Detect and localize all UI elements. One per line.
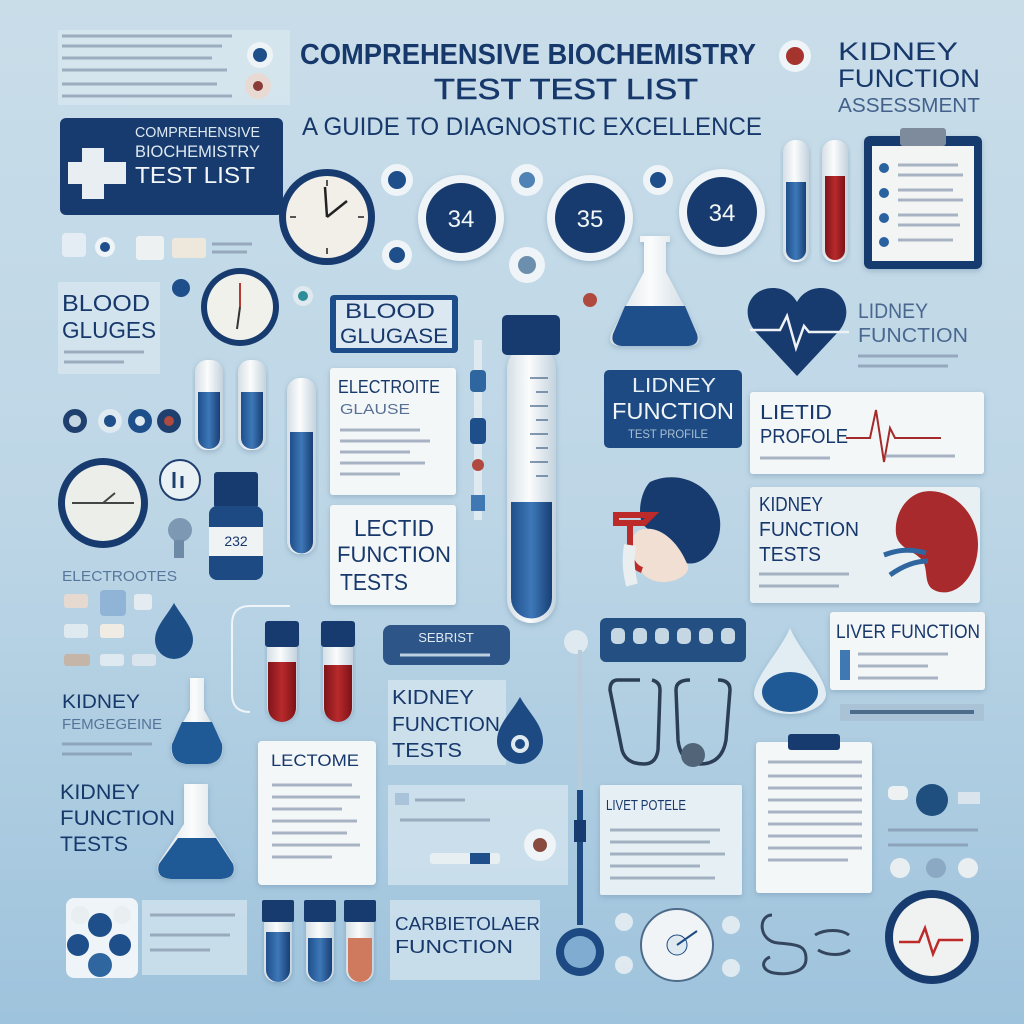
icon: ecg gauge: [885, 890, 979, 984]
icon: twin tubes: [195, 360, 266, 450]
icon: water drop left: [155, 603, 193, 659]
label: kidney function tests left: [60, 781, 175, 856]
panel: navy banner: [60, 118, 283, 215]
number badge 34: 34: [709, 200, 735, 227]
label: kidney function tests left: FUNCTION: [60, 807, 175, 830]
panel: kidney function tests centre: FUNCTION: [392, 714, 500, 736]
row of small chips: [62, 233, 252, 260]
icon: tall tube: [287, 378, 316, 554]
small icon grid right: [888, 784, 980, 878]
icon: flask lower: [158, 784, 234, 879]
label: lidney function: LIDNEY: [858, 300, 928, 323]
number badge 35: [547, 175, 633, 261]
label: kidney function tests left: TESTS: [60, 833, 128, 856]
icon: kidney cross-section: [616, 477, 720, 585]
panel: electrolite glause: [330, 368, 456, 495]
number badge 34: [679, 169, 765, 255]
icon: flask top: [610, 236, 700, 346]
label: lidney function: [858, 300, 968, 366]
panel: kidney function tests centre: TESTS: [392, 740, 462, 762]
navy caption bar: [840, 704, 984, 721]
small dial icons: [160, 460, 200, 558]
icon: clock large left: [58, 458, 148, 548]
icon: heart with pulse: [748, 288, 849, 376]
icon: blue test tube: [783, 140, 809, 262]
panel: kidney function assessment: FUNCTION: [838, 65, 980, 93]
icon: bottom tubes: [262, 900, 376, 982]
panel: blood gluges: GLUGES: [62, 317, 156, 343]
title: A GUIDE TO DIAGNOSTIC EXCELLENCE: [302, 113, 762, 141]
icon: stethoscope tube with chest piece: [556, 630, 604, 976]
icon: clock left: [201, 268, 279, 346]
panel: lidney function navy: [604, 370, 742, 448]
icon: water drop centre: [497, 697, 543, 764]
panel: blood gluges: BLOOD: [62, 290, 150, 316]
icon: triangular drop: [754, 628, 826, 714]
vertical dropper strip: [470, 340, 486, 520]
panel: syringe note: [388, 785, 568, 885]
panel: electrolite glause: ELECTROITE: [338, 377, 440, 397]
panel: lectid function tests: [330, 505, 456, 605]
panel: lidney function navy: TEST PROFILE: [628, 427, 708, 441]
label: kidney femgegeine: [62, 692, 162, 754]
panel: kidney function tests right: KIDNEY: [759, 494, 823, 516]
panel: liver function: LIVER FUNCTION: [836, 622, 980, 643]
panel: blood glugase: GLUGASE: [340, 325, 448, 348]
icon: puzzle grid: [66, 898, 138, 978]
panel: lectid function tests: LECTID: [354, 515, 434, 541]
panel: kidney function tests right: FUNCTION: [759, 519, 859, 541]
panel: lietid profole: [750, 392, 984, 474]
panel: kidney function assessment: KIDNEY: [838, 38, 958, 66]
navy pill: sebrist: SEBRIST: [418, 630, 474, 645]
small round icons: [381, 164, 673, 307]
panel: blood glugase: BLOOD: [345, 300, 435, 323]
panel: kidney function tests right: [750, 487, 980, 603]
number badge 35: 35: [577, 206, 603, 233]
label: kidney function tests left: KIDNEY: [60, 781, 140, 804]
icon: dial: [615, 909, 740, 981]
panel: liver function: [830, 612, 985, 690]
small icon grid left: [64, 590, 156, 666]
faded note bottom-left: [142, 900, 247, 975]
title: TEST TEST LIST: [434, 74, 698, 106]
panel: lietid profole: LIETID: [760, 402, 832, 424]
label: electrootes: ELECTROOTES: [62, 568, 177, 585]
label: kidney femgegeine: FEMGEGEINE: [62, 716, 162, 733]
icon: wall clock: [279, 169, 375, 265]
panel: liver potele: [600, 785, 742, 895]
panel: cardietolaer function: [390, 900, 540, 980]
panel: kidney function assessment: [779, 38, 980, 117]
icon: large test tube: [502, 315, 560, 623]
number badge 34: [418, 175, 504, 261]
row of mini badges: [63, 409, 181, 433]
icon: clipboard lower: [756, 734, 872, 893]
blue pill strip: [600, 618, 746, 662]
panel: cardietolaer function: CARBIETOLAER: [395, 914, 540, 934]
icon: stethoscope loops: [610, 680, 730, 767]
title: COMPREHENSIVE BIOCHEMISTRY: [300, 39, 756, 71]
number badge 34: 34: [448, 206, 474, 233]
panel: navy banner: BIOCHEMISTRY: [135, 142, 260, 161]
icon: medicine bottle: 232: [224, 533, 248, 549]
panel: lectome: [258, 741, 376, 885]
panel: electrolite glause: GLAUSE: [340, 401, 410, 418]
icon: clipboard top: [864, 128, 982, 269]
panel: lietid profole: PROFOLE: [760, 426, 848, 448]
icon: red tubes with bracket: [232, 606, 355, 722]
panel: blood gluges: [58, 282, 160, 374]
panel: lectid function tests: TESTS: [340, 569, 408, 595]
label: lidney function: FUNCTION: [858, 325, 968, 347]
panel: cardietolaer function: FUNCTION: [395, 937, 513, 957]
icon: medicine bottle: [209, 472, 263, 580]
panel: lectome: LECTOME: [271, 751, 359, 770]
panel: lidney function navy: FUNCTION: [612, 398, 734, 424]
panel: liver potele: LIVET POTELE: [606, 797, 686, 814]
panel: navy banner: COMPREHENSIVE: [135, 124, 260, 141]
panel: top-left notes: [58, 30, 290, 105]
icon: small flask: [171, 678, 223, 764]
panel: blood glugase: [330, 295, 458, 353]
panel: navy banner: TEST LIST: [135, 162, 255, 188]
panel: kidney function tests right: TESTS: [759, 544, 821, 566]
panel: kidney function tests centre: KIDNEY: [392, 687, 474, 709]
title: [300, 39, 762, 141]
label: kidney femgegeine: KIDNEY: [62, 692, 140, 713]
panel: lidney function navy: LIDNEY: [632, 375, 716, 397]
icon: red test tube: [822, 140, 848, 262]
icon: tubing loops: [762, 915, 850, 974]
small icons: [172, 279, 313, 306]
panel: kidney function assessment: ASSESSMENT: [838, 95, 980, 117]
navy pill: sebrist: [383, 625, 510, 665]
panel: kidney function tests centre: [388, 680, 506, 765]
panel: lectid function tests: FUNCTION: [337, 542, 451, 567]
